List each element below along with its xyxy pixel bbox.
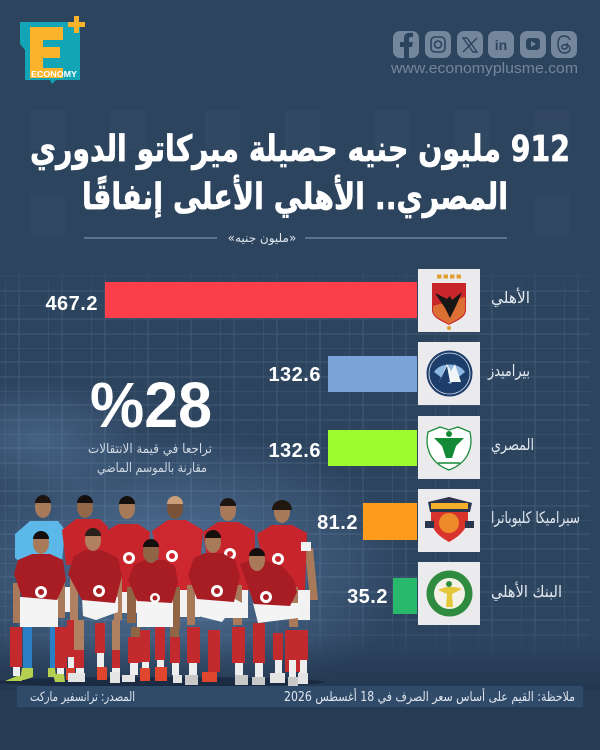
- background watermark pattern: [30, 110, 570, 235]
- icon: X: [457, 31, 483, 58]
- bar: بيراميدز: [268, 356, 417, 392]
- bar: سيراميكا كليوباترا: 81.2: [317, 512, 358, 534]
- callout: 28% decline: تراجعا في قيمة الانتقالات: [88, 442, 212, 457]
- bar: بيراميدز: 132.6: [268, 364, 321, 386]
- source: المصدر: ترانسفير ماركت: [30, 690, 135, 705]
- bar: البنك الأهلي: [347, 578, 417, 614]
- player: front row 1: [5, 531, 67, 682]
- team names: البنك الأهلي: [491, 581, 562, 602]
- player: front row 5: [240, 548, 300, 687]
- player: back row 5: [202, 498, 255, 682]
- footer bar: [17, 686, 583, 707]
- team photo: [0, 495, 325, 687]
- callout: 28% decline: [88, 369, 212, 476]
- bar: الأهلي: 467.2: [45, 293, 98, 315]
- bar: المصري: [268, 430, 417, 466]
- logo card: National Bank: [418, 562, 480, 625]
- team names: بيراميدز: [487, 361, 530, 381]
- icon: instagram: [425, 31, 451, 58]
- player: back row 3: [103, 496, 150, 681]
- player: front row 2: [68, 528, 122, 683]
- icon: facebook: [393, 31, 419, 58]
- unit subtitle: «مليون جنيه»: [228, 231, 296, 246]
- player: back row 4: [152, 496, 203, 681]
- callout: 28% decline: %28: [90, 369, 212, 441]
- icon: youtube: [520, 31, 546, 58]
- bar: المصري: 132.6: [268, 440, 321, 462]
- player: front row 4: [185, 530, 248, 685]
- logo card: Al Ahly: [418, 269, 480, 332]
- icon: linkedin: [488, 31, 514, 58]
- logo: Economy Plus: ECONOMY: [31, 70, 78, 79]
- bar: سيراميكا كليوباترا: [317, 503, 417, 540]
- bar: الأهلي: [45, 282, 417, 318]
- social icons: [393, 31, 577, 58]
- team names: الأهلي: [491, 287, 530, 308]
- player: front row 3: [122, 539, 182, 683]
- icon: linkedin: in: [495, 37, 507, 53]
- website address: www.economyplusme.com: [390, 61, 578, 77]
- logo card: Ceramica Cleopatra: [418, 489, 480, 552]
- bar chart: [45, 282, 417, 614]
- player: captain back row: [257, 500, 318, 684]
- logo card: Pyramids: [418, 342, 480, 405]
- icon: threads: [551, 31, 577, 58]
- team names: المصري: [491, 435, 534, 455]
- bar: البنك الأهلي: 35.2: [347, 586, 388, 608]
- logo card: Al Masry: [418, 416, 480, 479]
- team names: [487, 287, 580, 602]
- logo: Economy Plus: [20, 16, 85, 84]
- callout: 28% decline: مقارنة بالموسم الماضي: [97, 461, 207, 476]
- player: back row 2: [62, 495, 108, 680]
- player: goalkeeper back row: [15, 495, 65, 680]
- title: [30, 129, 570, 218]
